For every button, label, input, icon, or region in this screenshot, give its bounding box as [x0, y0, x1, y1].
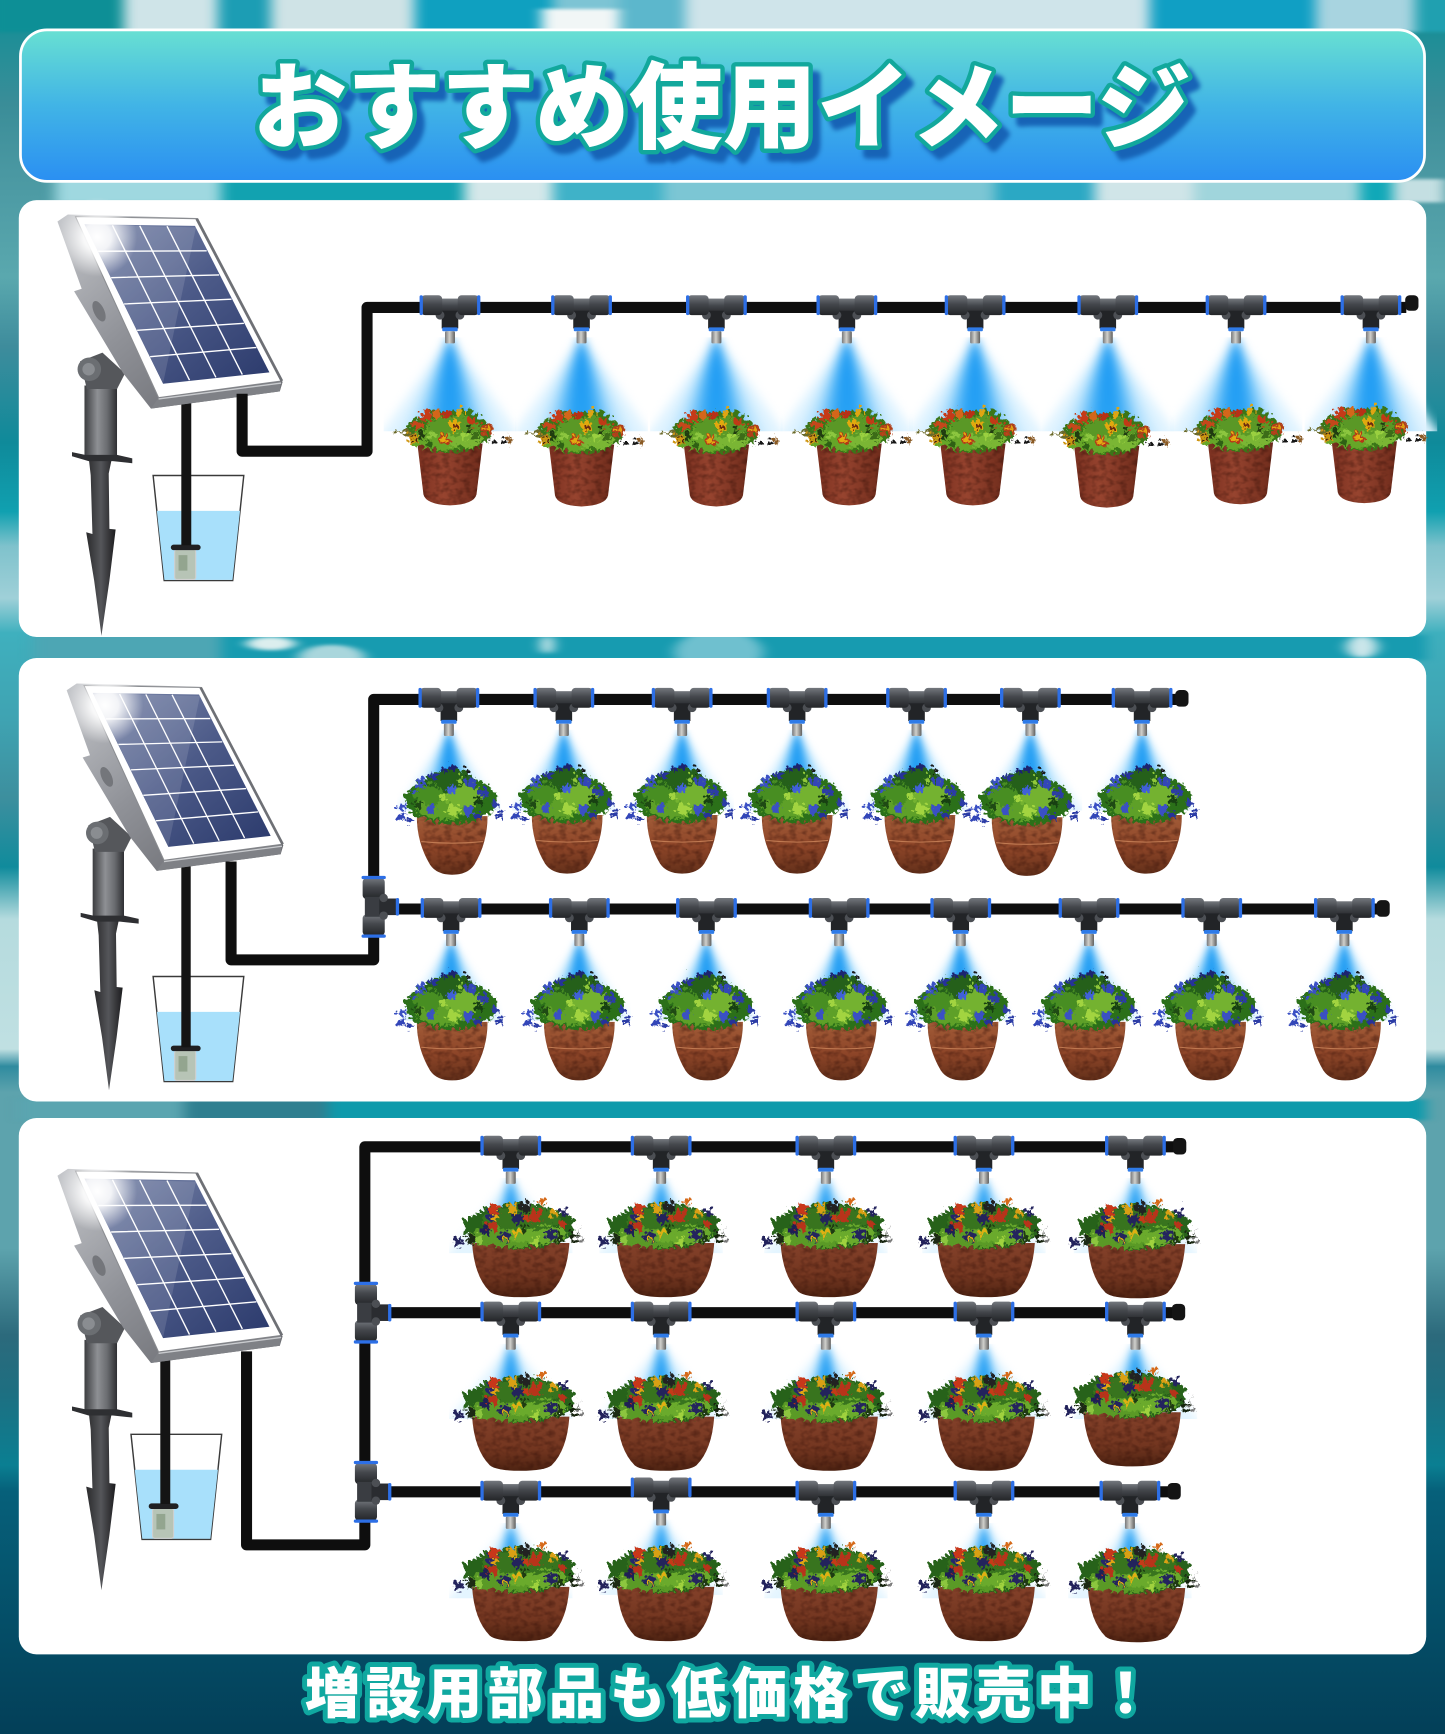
mister and potted flowers upper 1: [390, 688, 508, 875]
panel: three-line layout: [19, 1118, 1426, 1654]
mister and potted flowers lower 8: [1286, 898, 1403, 1080]
mister and potted flowers lower 6: [1030, 898, 1148, 1080]
hose: panel 2: [231, 690, 1390, 960]
mister and potted flowers 2: [506, 295, 657, 506]
footer text: 増設用部品も低価格で販売中！: [305, 1663, 1159, 1725]
hose: panel 3: [247, 1138, 1186, 1545]
mister and potted flowers row 1 no. 4: [914, 1136, 1054, 1297]
mister and potted flowers row 2 no. 3: [756, 1302, 896, 1471]
mister and potted flowers row 2 no. 5: [1063, 1302, 1205, 1466]
hose junction: [362, 876, 399, 938]
mister and potted flowers upper 2: [505, 688, 622, 874]
mister and potted flowers 5: [900, 295, 1050, 505]
mister and potted flowers row 1 no. 1: [441, 1136, 581, 1297]
mister and potted flowers upper 4: [738, 688, 856, 874]
mister and potted flowers lower 7: [1152, 898, 1270, 1080]
mister and potted flowers lower 1: [392, 898, 510, 1080]
solar pump on stake: [67, 667, 283, 1090]
mister and potted flowers upper 6: [969, 688, 1089, 876]
mister and potted flowers lower 3: [648, 898, 765, 1080]
mister and potted flowers lower 5: [902, 898, 1019, 1080]
mister and potted flowers row 3 no. 4: [914, 1481, 1054, 1641]
water cup and intake hose: [153, 863, 244, 1082]
mister and potted flowers row 3 no. 2: [591, 1477, 731, 1641]
mister and potted flowers row 3 no. 1: [441, 1481, 581, 1641]
mister and potted flowers row 3 no. 5: [1060, 1481, 1200, 1642]
mister and potted flowers 1: [375, 295, 525, 505]
mister and potted flowers upper 5: [858, 688, 975, 874]
water cup and intake hose: [153, 393, 244, 581]
mister and potted flowers row 2 no. 1: [441, 1302, 581, 1471]
mister and potted flowers lower 4: [780, 898, 898, 1080]
mister and potted flowers row 2 no. 4: [914, 1302, 1054, 1471]
mister and potted flowers 6: [1033, 295, 1183, 508]
mister and potted flowers 8: [1296, 295, 1445, 503]
mister and potted flowers row 1 no. 2: [591, 1136, 731, 1297]
hose junction upper: [354, 1282, 391, 1344]
title text: おすすめ使用イメージ: [253, 55, 1191, 160]
mister and potted flowers upper 7: [1083, 688, 1201, 874]
panel: single-line layout: [19, 197, 1445, 637]
mister and potted flowers row 1 no. 3: [756, 1136, 896, 1297]
water cup and intake hose: [131, 1355, 222, 1539]
hose junction lower: [354, 1461, 391, 1523]
solar pump on stake: [57, 1152, 283, 1590]
mister and potted flowers row 3 no. 3: [756, 1481, 896, 1641]
mister and potted flowers row 1 no. 5: [1066, 1136, 1205, 1298]
mister and potted flowers 4: [772, 295, 922, 505]
panel: two-line layout: [19, 658, 1426, 1101]
title banner: [20, 30, 1425, 181]
solar pump on stake: [57, 197, 283, 636]
hose: panel 1: [242, 295, 1418, 451]
mister and potted flowers 3: [641, 295, 792, 506]
mister and potted flowers lower 2: [521, 898, 638, 1080]
mister and potted flowers 7: [1161, 295, 1311, 504]
mister and potted flowers upper 3: [624, 688, 741, 874]
mister and potted flowers row 2 no. 2: [591, 1302, 731, 1471]
